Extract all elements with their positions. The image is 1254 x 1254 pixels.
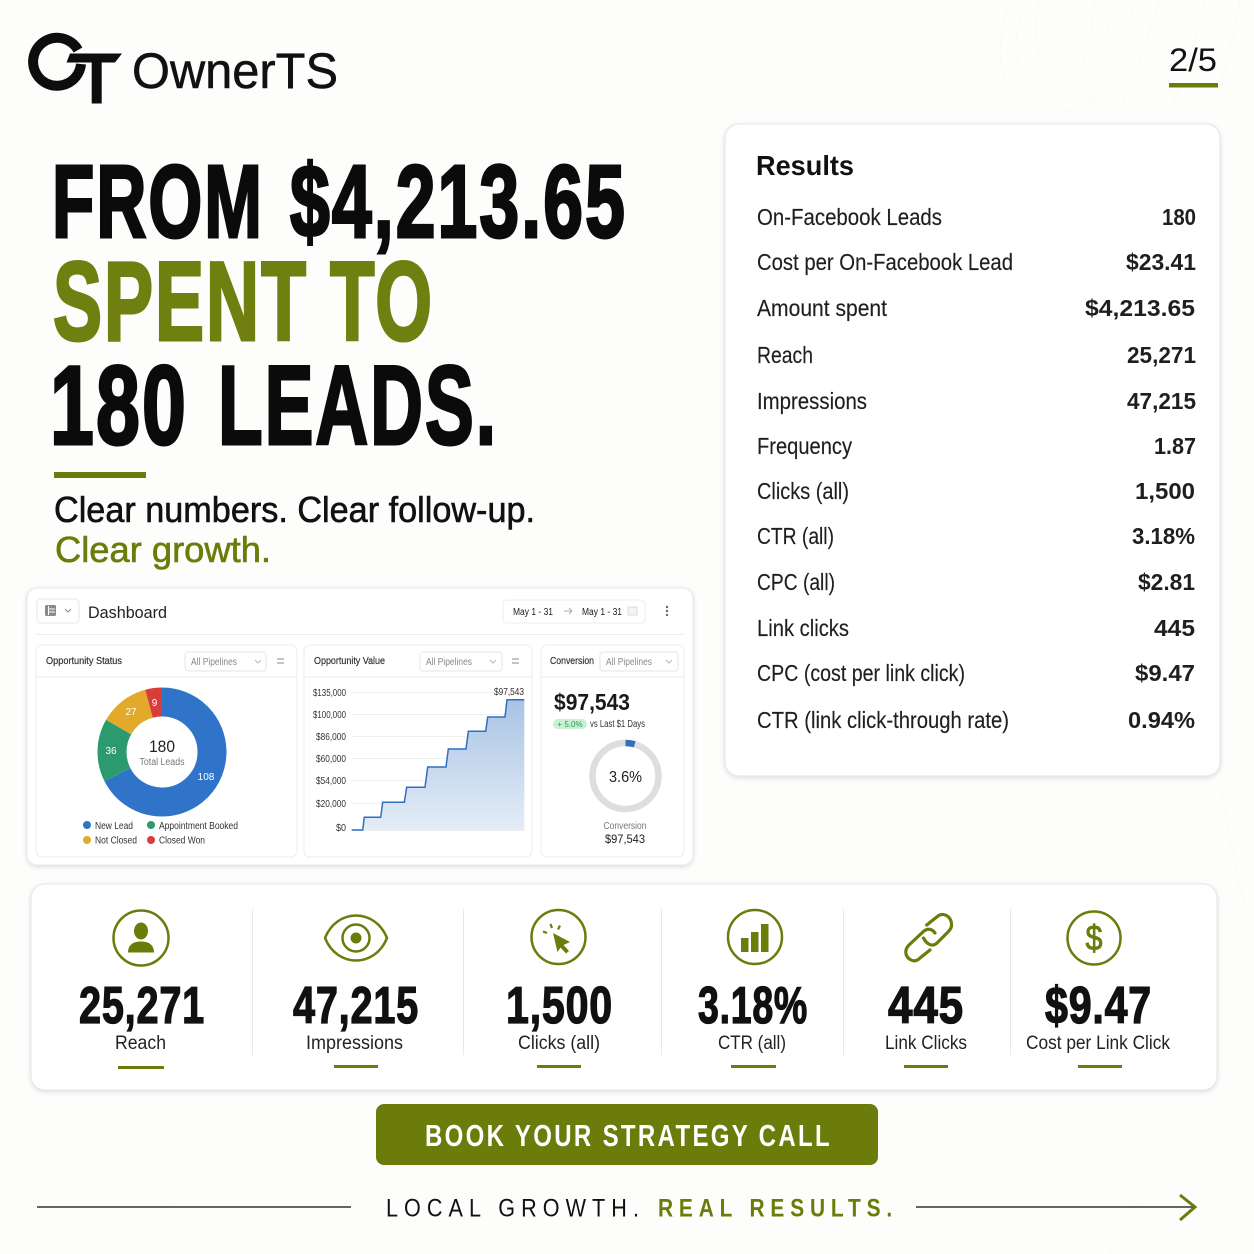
card: conversion: $97,543 <box>605 832 645 846</box>
headline: FROM <box>52 144 264 259</box>
KPI: cost per link click: Cost per Link Click <box>1026 1033 1170 1054</box>
donut chart: Total Leads <box>140 757 184 768</box>
KPI: link clicks: Link Clicks <box>885 1033 967 1054</box>
footer tagline <box>37 1194 1195 1222</box>
KPI: CTR: CTR (all) <box>718 1033 786 1054</box>
headline rule <box>54 472 146 478</box>
KPI: reach: 25,271 <box>79 977 205 1035</box>
results table: 25,271 <box>1127 342 1196 368</box>
dashboard header: May 1 - 31 <box>582 607 622 618</box>
results table: CTR (link click-through rate) <box>757 707 1009 733</box>
footer tagline: REAL RESULTS. <box>658 1194 898 1222</box>
conversion ring: 3.6% <box>609 769 642 786</box>
step chart: $86,000 <box>316 732 346 743</box>
results table <box>757 204 1196 733</box>
results table: 445 <box>1154 615 1195 641</box>
results table: 47,215 <box>1127 388 1196 414</box>
results table: Clicks (all) <box>757 478 849 504</box>
results table: $9.47 <box>1135 660 1195 686</box>
panel: dashboard <box>27 588 693 865</box>
headline: 180 <box>50 343 188 468</box>
wordmark: OwnerTS <box>132 43 338 99</box>
CTA button <box>376 1104 878 1165</box>
step chart: $97,543 <box>494 687 524 698</box>
KPI: clicks <box>506 910 613 1068</box>
subheading: Clear numbers. Clear follow-up. <box>54 489 535 530</box>
KPI: impressions: Impressions <box>306 1033 403 1054</box>
headline: $4,213.65 <box>290 144 627 259</box>
step chart: $100,000 <box>313 710 346 721</box>
step chart: $60,000 <box>316 754 346 765</box>
step chart <box>313 687 524 834</box>
results table: 3.18% <box>1132 523 1195 549</box>
results table: Reach <box>757 342 813 368</box>
card: conversion: Conversion <box>550 656 594 667</box>
dashboard header: May 1 - 31 <box>513 607 553 618</box>
card: opportunity status: Opportunity Status <box>46 656 122 667</box>
KPI: reach <box>79 910 205 1069</box>
icon: chain link <box>906 914 952 961</box>
logo: OwnerTS <box>33 38 338 104</box>
results heading: Results <box>756 150 854 181</box>
results table: Cost per On-Facebook Lead <box>757 249 1013 275</box>
KPI: link clicks <box>885 914 967 1068</box>
results table: 180 <box>1162 204 1196 230</box>
results table: $23.41 <box>1126 249 1196 275</box>
card: opportunity value <box>304 645 532 857</box>
panel: results <box>725 124 1220 776</box>
donut legend: Not Closed <box>95 836 137 846</box>
dashboard header <box>36 599 684 634</box>
KPI: CTR <box>698 910 808 1068</box>
card: opportunity value: Opportunity Value <box>314 656 385 667</box>
icon: OT monogram <box>33 38 122 104</box>
icon: dollar <box>1068 912 1120 964</box>
KPI: impressions: 47,215 <box>293 977 419 1035</box>
headline <box>50 144 627 468</box>
donut chart: 108 <box>198 772 215 783</box>
KPI: cost per link click <box>1026 912 1170 1068</box>
results table: CPC (cost per link click) <box>757 660 965 686</box>
icon: eye <box>325 916 387 960</box>
card: conversion: All Pipelines <box>606 657 652 668</box>
results table: Link clicks <box>757 615 849 641</box>
icon: cursor click <box>532 910 586 964</box>
results table: 0.94% <box>1128 707 1195 733</box>
donut chart: 9 <box>152 698 158 709</box>
results table: $4,213.65 <box>1085 295 1195 321</box>
card: conversion: + 5.0% <box>557 720 583 729</box>
step chart: $0 <box>336 823 346 834</box>
headline: SPENT <box>53 239 308 364</box>
KPI: clicks: Clicks (all) <box>518 1033 600 1054</box>
results table: $2.81 <box>1138 569 1195 595</box>
KPI: clicks: 1,500 <box>506 977 613 1035</box>
donut chart <box>105 698 215 802</box>
arrow <box>916 1195 1195 1220</box>
dashboard header: Dashboard <box>88 603 167 622</box>
card: conversion <box>541 645 684 857</box>
results table: Amount spent <box>757 295 888 321</box>
donut legend: New Lead <box>95 821 133 832</box>
headline: LEADS. <box>218 343 498 468</box>
card: opportunity status <box>36 645 297 857</box>
KPI: impressions <box>293 916 419 1068</box>
KPI: reach: Reach <box>115 1033 166 1054</box>
footer tagline: LOCAL GROWTH. <box>386 1194 645 1222</box>
page indicator: 2/5 <box>1169 42 1217 78</box>
results table: Frequency <box>757 433 852 459</box>
results table: Impressions <box>757 388 867 414</box>
step chart: $135,000 <box>313 688 346 699</box>
results table: 1.87 <box>1154 433 1196 459</box>
card: opportunity status: All Pipelines <box>191 657 237 668</box>
card: conversion: vs Last $1 Days <box>590 719 645 730</box>
donut legend: Closed Won <box>159 836 205 846</box>
step chart: $20,000 <box>316 799 346 810</box>
donut chart: 27 <box>125 707 137 718</box>
donut chart: 180 <box>149 737 175 756</box>
subheading: Clear growth. <box>55 529 271 570</box>
card: conversion: Conversion <box>604 821 646 832</box>
icon: person <box>114 910 168 966</box>
conversion ring <box>592 743 658 809</box>
results table: CPC (all) <box>757 569 835 595</box>
donut chart: 36 <box>105 746 117 757</box>
results table: CTR (all) <box>757 523 834 549</box>
icon: bar chart <box>728 910 782 964</box>
donut legend <box>83 821 238 846</box>
panel: KPI strip <box>31 884 1217 1090</box>
card: conversion: $97,543 <box>554 689 630 715</box>
KPI: link clicks: 445 <box>888 977 964 1035</box>
KPI: CTR: 3.18% <box>698 977 808 1035</box>
headline: TO <box>330 239 434 364</box>
step chart: $54,000 <box>316 776 346 787</box>
KPI: cost per link click: $9.47 <box>1045 977 1152 1035</box>
card: opportunity value: All Pipelines <box>426 657 472 668</box>
results table: On-Facebook Leads <box>757 204 942 230</box>
icon: dollar: $ <box>1086 919 1102 958</box>
subheading <box>54 489 535 570</box>
donut legend: Appointment Booked <box>159 821 238 832</box>
results table: 1,500 <box>1135 478 1195 504</box>
CTA button: BOOK YOUR STRATEGY CALL <box>425 1118 832 1153</box>
